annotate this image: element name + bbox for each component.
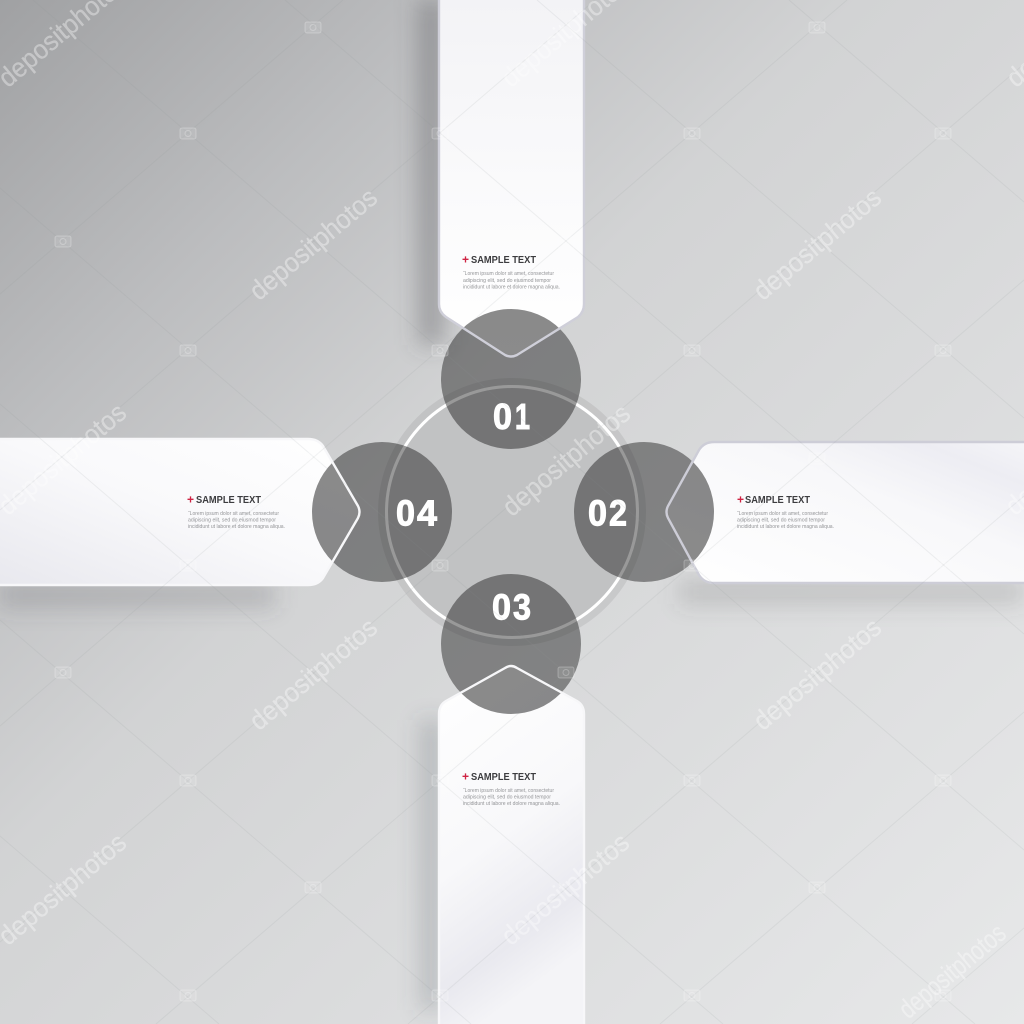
text block: left banner: “Lorem ipsum dolor sit amet, consectetur	[188, 511, 279, 517]
number 02	[588, 492, 627, 534]
watermark text: depositphotos	[495, 827, 635, 951]
watermark text: depositphotos	[496, 398, 636, 522]
text block: left banner: +	[187, 492, 194, 506]
text block: top banner: “Lorem ipsum dolor sit amet, consectetur	[463, 271, 554, 277]
text block: left banner: adipiscing elit, sed do eiusmod tempor	[188, 518, 276, 524]
circle 03	[441, 574, 581, 714]
number 02: 0	[588, 492, 607, 534]
text block: bottom banner: +	[462, 770, 469, 784]
text block: top banner: SAMPLE TEXT	[471, 254, 537, 266]
text block: right banner: +	[737, 492, 744, 506]
panel: banner 04 left	[0, 438, 360, 586]
banner tips seen through circles	[312, 309, 714, 714]
text block: right banner: SAMPLE TEXT	[745, 494, 811, 506]
text block: top banner: adipiscing elit, sed do eiusmod tempor	[463, 278, 551, 284]
text block: top banner: +	[462, 252, 469, 266]
banner 02 outline	[666, 442, 1024, 583]
text block: right banner: incididunt ut labore et dolore magna aliqua.	[737, 524, 834, 530]
circle 04	[312, 442, 452, 582]
number 03: 3	[513, 586, 531, 628]
panel: banner 03 bottom	[438, 666, 585, 1024]
circle 02	[574, 442, 714, 582]
number 01: 1	[515, 396, 530, 437]
number 04: 0	[396, 492, 415, 534]
text block: left banner: incididunt ut labore et dolore magna aliqua.	[188, 524, 285, 530]
watermark text: depositphotos	[243, 612, 383, 736]
watermark text: depositphotos	[747, 612, 887, 736]
text block: bottom banner: adipiscing elit, sed do eiusmod tempor	[463, 794, 551, 800]
text block: bottom banner: SAMPLE TEXT	[471, 771, 537, 783]
panel: banner 01 top	[438, 0, 585, 356]
number 03	[492, 586, 531, 628]
watermark text: depositphotos	[243, 182, 383, 306]
number 03: 0	[492, 586, 511, 628]
text block: left banner	[187, 492, 285, 530]
panel: center disc	[382, 382, 642, 642]
text block: left banner: SAMPLE TEXT	[196, 494, 262, 506]
number 04: 4	[417, 492, 437, 534]
banner 01 outline	[439, 0, 584, 356]
circle 01	[441, 309, 581, 449]
number 02: 2	[609, 492, 627, 534]
number 01: 0	[493, 396, 512, 437]
text block: bottom banner	[462, 770, 560, 807]
text block: right banner: adipiscing elit, sed do eiusmod tempor	[737, 518, 825, 524]
text block: right banner: “Lorem ipsum dolor sit amet, consectetur	[737, 511, 828, 517]
banner 03 outline	[439, 666, 584, 1024]
number 01	[493, 396, 530, 437]
text block: right banner	[737, 492, 834, 530]
panel: banner 02 right	[666, 441, 1024, 584]
number 04	[396, 492, 437, 534]
text block: bottom banner: incididunt ut labore et dolore magna aliqua.	[463, 801, 560, 807]
text block: top banner	[462, 252, 560, 290]
text block: bottom banner: “Lorem ipsum dolor sit amet, consectetur	[463, 788, 554, 794]
text block: top banner: incididunt ut labore et dolore magna aliqua.	[463, 284, 560, 290]
banner 04 outline	[0, 439, 360, 585]
watermark text: depositphotos	[747, 182, 887, 306]
